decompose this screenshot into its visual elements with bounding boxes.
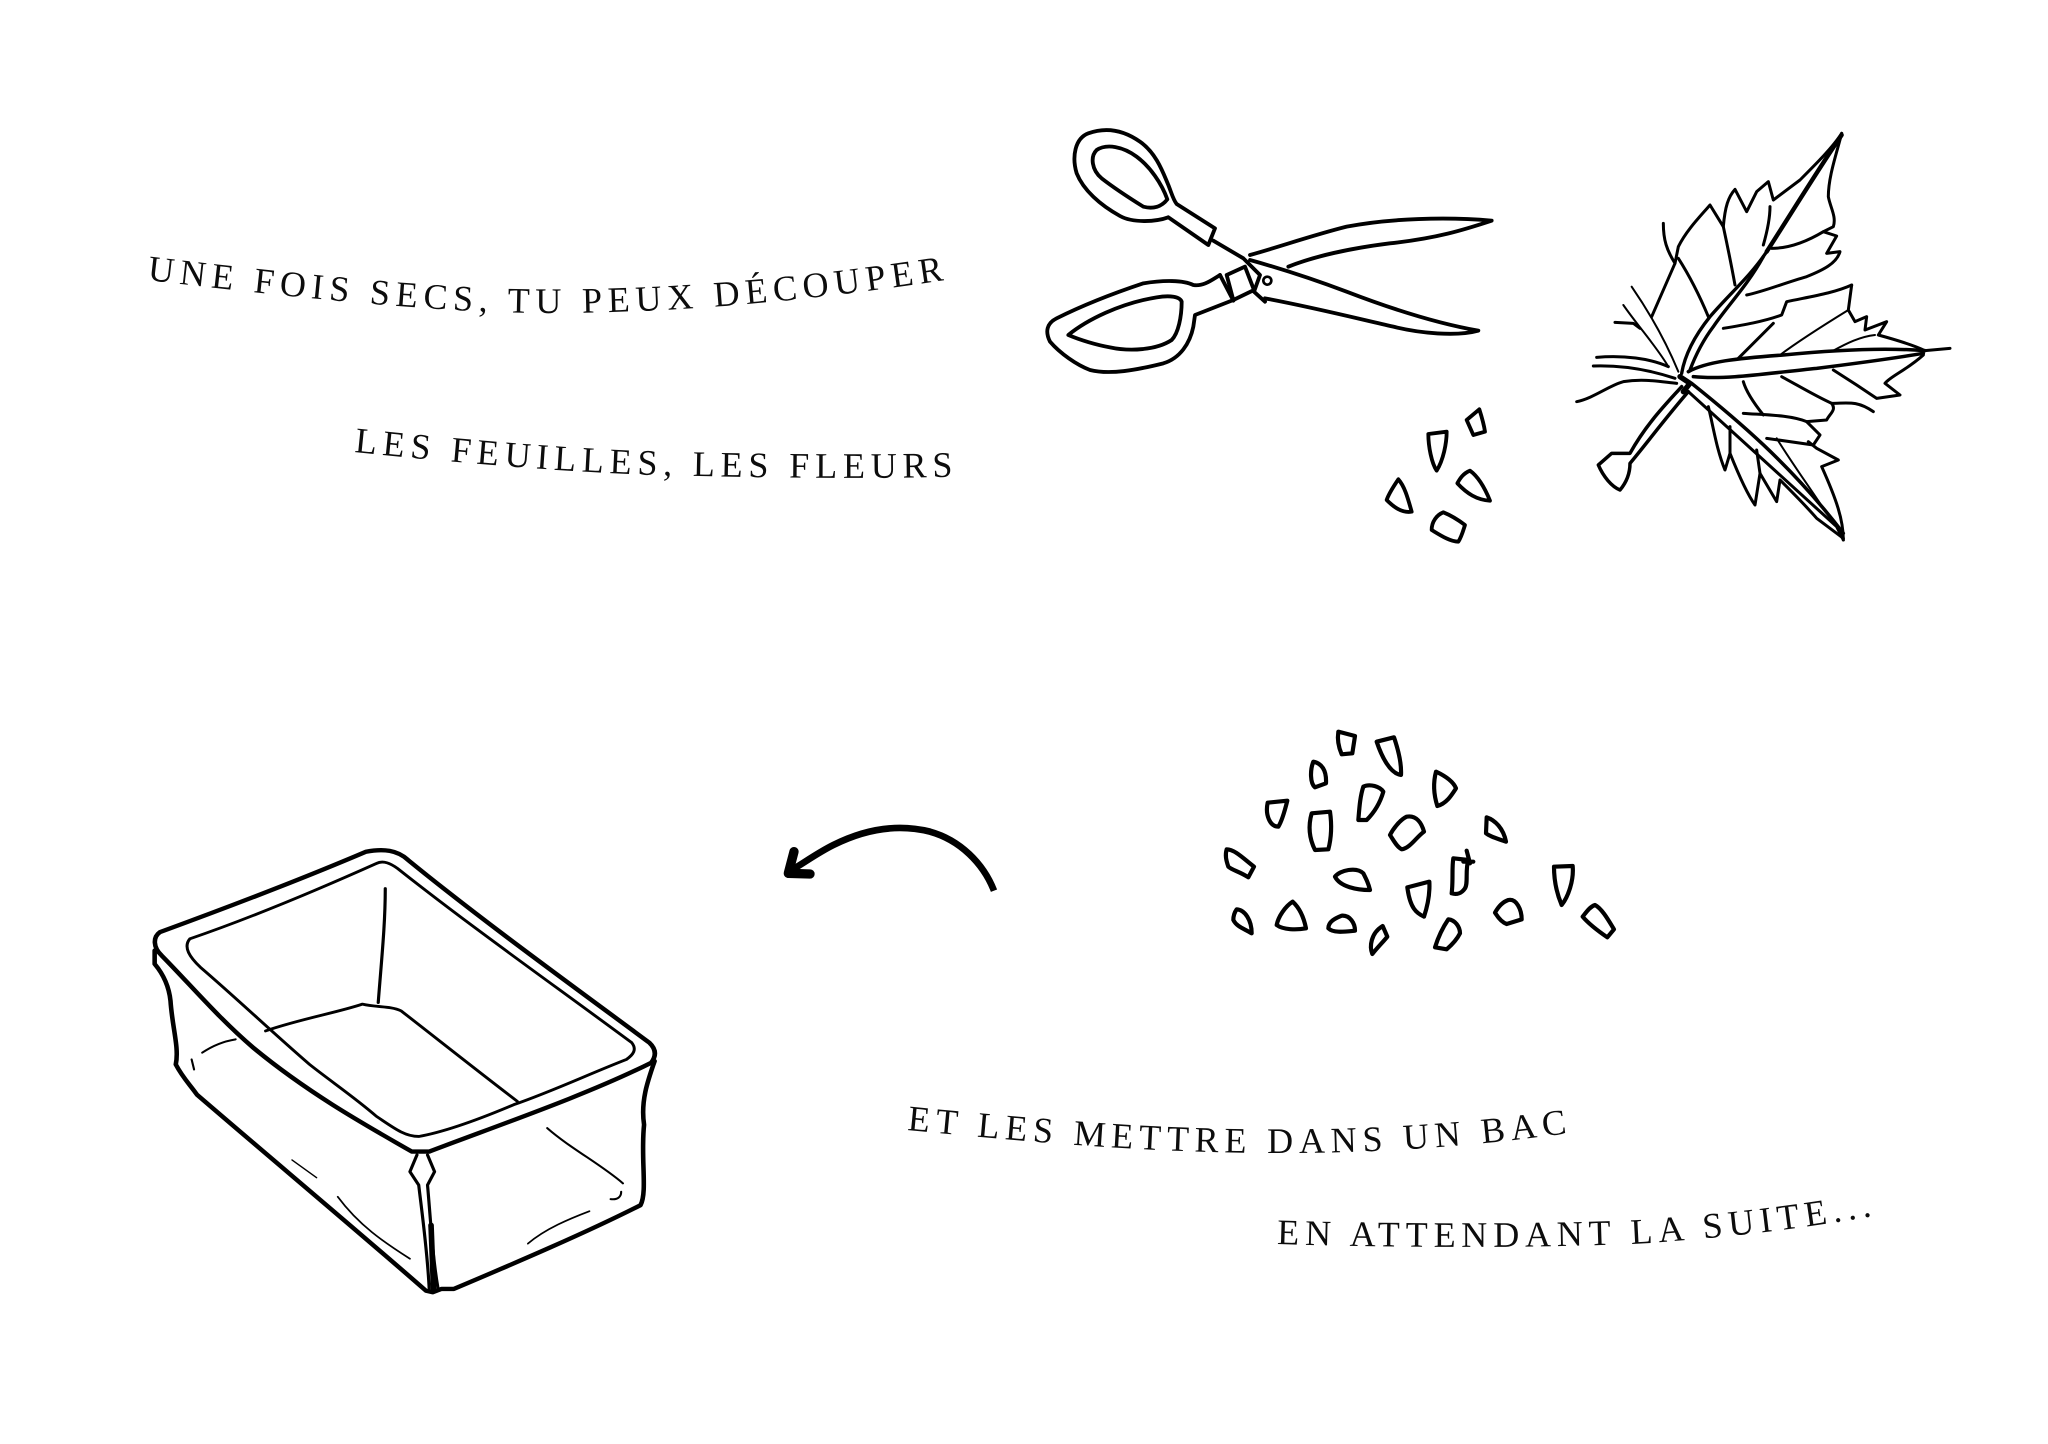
text: les feuilles, les fleurs: LES FEUILLES, LES FLEURS [355,428,950,481]
icon: scissors [1047,130,1492,372]
icon: plastic box [155,850,655,1292]
text: une fois secs, tu peux découper: UNE FOIS SECS, TU PEUX DÉCOUPER [150,256,944,317]
text: et les mettre dans un bac: ET LES METTRE DANS UN BAC [908,1106,1566,1153]
icon: leaf fragments near scissors [1387,409,1490,542]
arrow: curved arrow toward the box [788,828,994,891]
icon: pile of cut leaf pieces [1226,732,1614,954]
text: en attendant la suite: EN ATTENDANT LA SUITE... [1278,1200,1870,1247]
icon: leaf [1577,133,1950,540]
